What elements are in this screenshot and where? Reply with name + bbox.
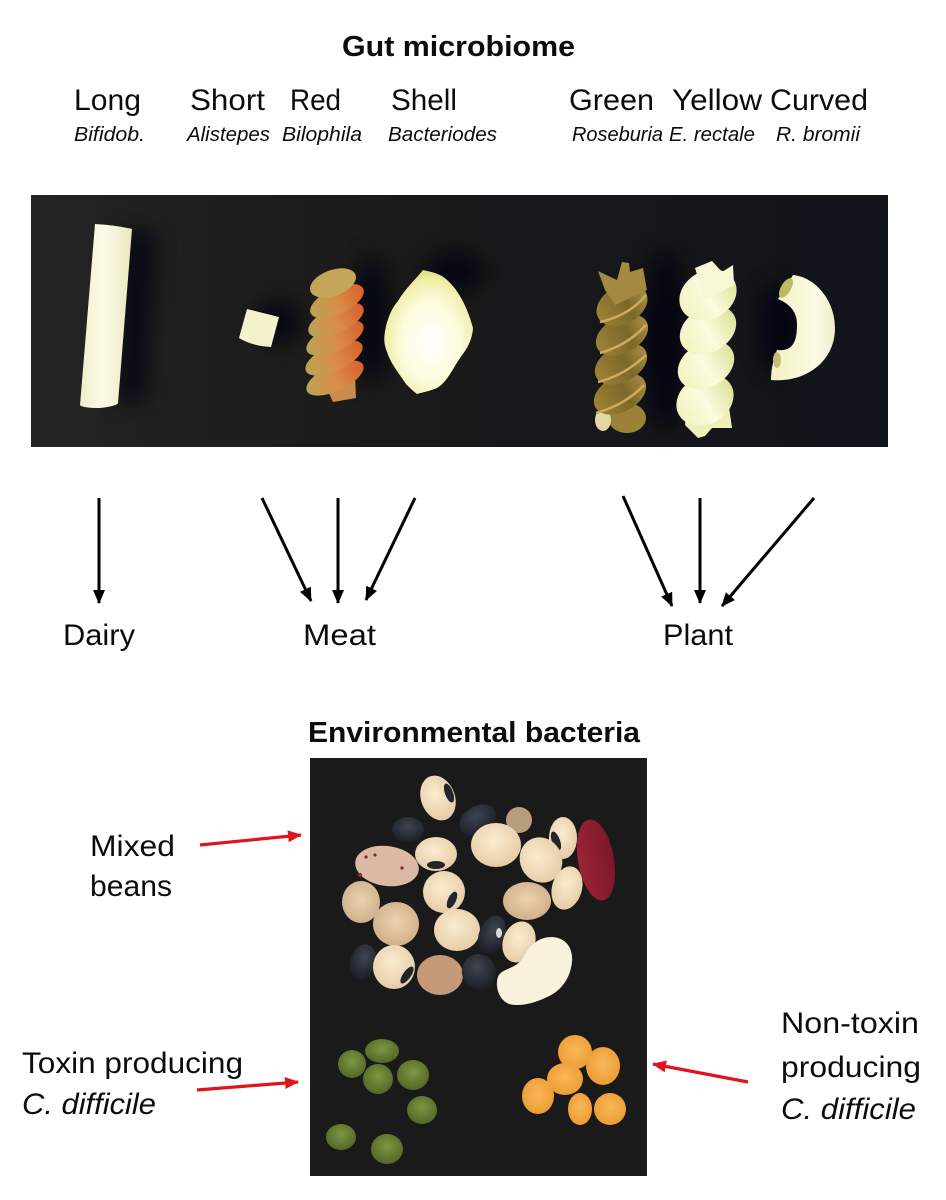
- label: Dairy: Dairy: [63, 619, 135, 652]
- group: toxin producing green peas: [326, 1039, 437, 1164]
- arrow: to mixed beans: [200, 835, 301, 845]
- panel: pasta photo: [31, 195, 888, 447]
- label: Non-toxin producing C. difficile: Non-toxin: [781, 1007, 919, 1040]
- bacteria name labels: [74, 124, 861, 146]
- icon: red fusilli: [300, 263, 369, 403]
- species: Alistepes: Alistepes: [186, 124, 270, 146]
- label: Red: Red: [290, 84, 341, 117]
- icon: yellow fusilli: [667, 259, 746, 438]
- label: Short: Short: [190, 84, 266, 117]
- icon: ridged shell pasta: [384, 270, 473, 394]
- species: R. bromii: R. bromii: [776, 124, 861, 146]
- panel: beans photo: [310, 758, 647, 1176]
- label: Meat: Meat: [303, 619, 377, 652]
- label: Mixed beans: [90, 830, 175, 903]
- species: Bilophila: Bilophila: [282, 124, 362, 146]
- group: mixed beans: [342, 771, 621, 1005]
- arrows: pasta to dairy: [98, 498, 100, 603]
- species: Bifidob.: Bifidob.: [74, 124, 145, 146]
- label: Long: Long: [74, 84, 141, 117]
- title: Gut microbiome: Gut microbiome: [342, 31, 575, 63]
- arrows: pasta to plant: [623, 496, 814, 606]
- label: Non-toxin producing C. difficile: C. difficile: [781, 1093, 916, 1126]
- heading: Environmental bacteria: Environmental bacteria: [308, 717, 641, 749]
- arrows: pasta to meat: [262, 498, 415, 603]
- label: Plant: Plant: [663, 619, 734, 652]
- species: E. rectale: E. rectale: [669, 124, 755, 146]
- label: Yellow: Yellow: [672, 84, 762, 117]
- arrow: to green peas: [197, 1082, 298, 1090]
- pasta shape labels: [74, 84, 868, 117]
- label: Mixed beans: Mixed: [90, 830, 175, 863]
- species: Bacteriodes: Bacteriodes: [388, 124, 497, 146]
- icon: curved elbow pasta: [771, 275, 835, 380]
- label: Shell: Shell: [391, 84, 457, 117]
- label: Non-toxin producing C. difficile: [781, 1007, 921, 1126]
- label: Curved: Curved: [770, 84, 868, 117]
- label: Toxin producing C. difficile: C. difficile: [22, 1088, 156, 1121]
- icon: green fusilli: [587, 262, 655, 433]
- group: non-toxin producing orange peas: [522, 1035, 626, 1125]
- label: Mixed beans: beans: [90, 870, 172, 903]
- icon: short tube pasta: [239, 309, 279, 347]
- label: Non-toxin producing C. difficile: producing: [781, 1051, 921, 1084]
- label: Green: Green: [569, 84, 654, 117]
- icon: long tube pasta: [80, 224, 132, 408]
- species: Roseburia: Roseburia: [572, 124, 663, 146]
- label: Toxin producing C. difficile: Toxin producing: [22, 1047, 243, 1080]
- label: Toxin producing C. difficile: [22, 1047, 243, 1121]
- arrow: to orange peas: [653, 1064, 748, 1082]
